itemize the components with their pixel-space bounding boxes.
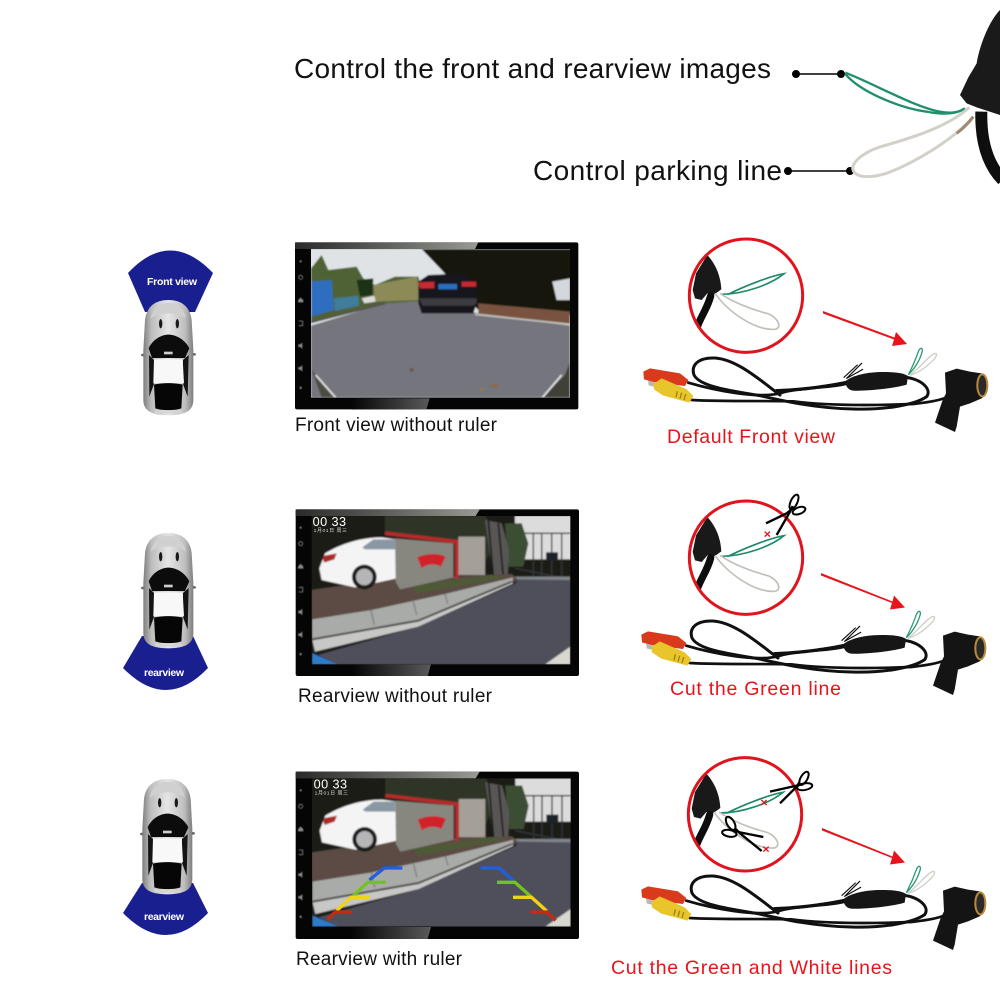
icon: car with rearview sector: rearview [144,911,185,923]
screen: rearview with coloured parking ruler [296,772,579,939]
caption: Cut the Green line: Cut the Green line [670,678,841,700]
arrow: inset to wires [822,828,905,864]
icon: car with rearview sector [123,533,208,690]
inset: wire detail circle with both wires cut [688,758,813,871]
icon: car with rearview sector: rearview [144,667,185,679]
callout line: white wires [784,168,854,174]
inset: wire detail circle with green wire cut [689,493,806,614]
caption: Front view without ruler: Front view without ruler [295,415,498,436]
screen: rearview without ruler [296,509,579,676]
icon: car with rearview sector [123,779,208,935]
photo: camera cable with green and white wire loops [845,10,1000,180]
label: Control parking line: Control parking line [533,155,782,186]
arrow: inset to wires [823,311,907,346]
caption: Rearview with ruler: Rearview with ruler [296,949,463,970]
photo: camera cable assembly [641,611,985,695]
screen: rearview with coloured parking ruler: 1月01日 周三 [315,791,348,797]
icon: car with front view sector [128,250,213,415]
screen: front view without ruler [295,242,578,409]
callout line: green wires [792,70,844,78]
screen: rearview with coloured parking ruler: 00 33 [314,777,347,791]
photo: camera cable assembly [641,866,985,950]
screen: rearview without ruler: 1月01日 周三 [314,528,347,534]
icon: car with front view sector: Front view [147,276,198,288]
screen: rearview without ruler: 00 33 [313,515,346,529]
row 2: rearview without ruler [123,493,985,707]
label: Control the front and rearview images: Control the front and rearview images [294,53,771,84]
row 3: rearview with ruler [123,758,985,979]
arrow: inset to wires [821,573,905,610]
parking ruler lines [328,868,556,920]
caption: Cut the Green and White lines: Cut the Green and White lines [611,957,892,979]
caption: Default Front view: Default Front view [667,426,836,448]
inset: wire detail circle [689,239,803,352]
row 1: front view [128,239,987,448]
caption: Rearview without ruler: Rearview without ruler [298,686,493,707]
photo: camera cable assembly [643,348,987,432]
